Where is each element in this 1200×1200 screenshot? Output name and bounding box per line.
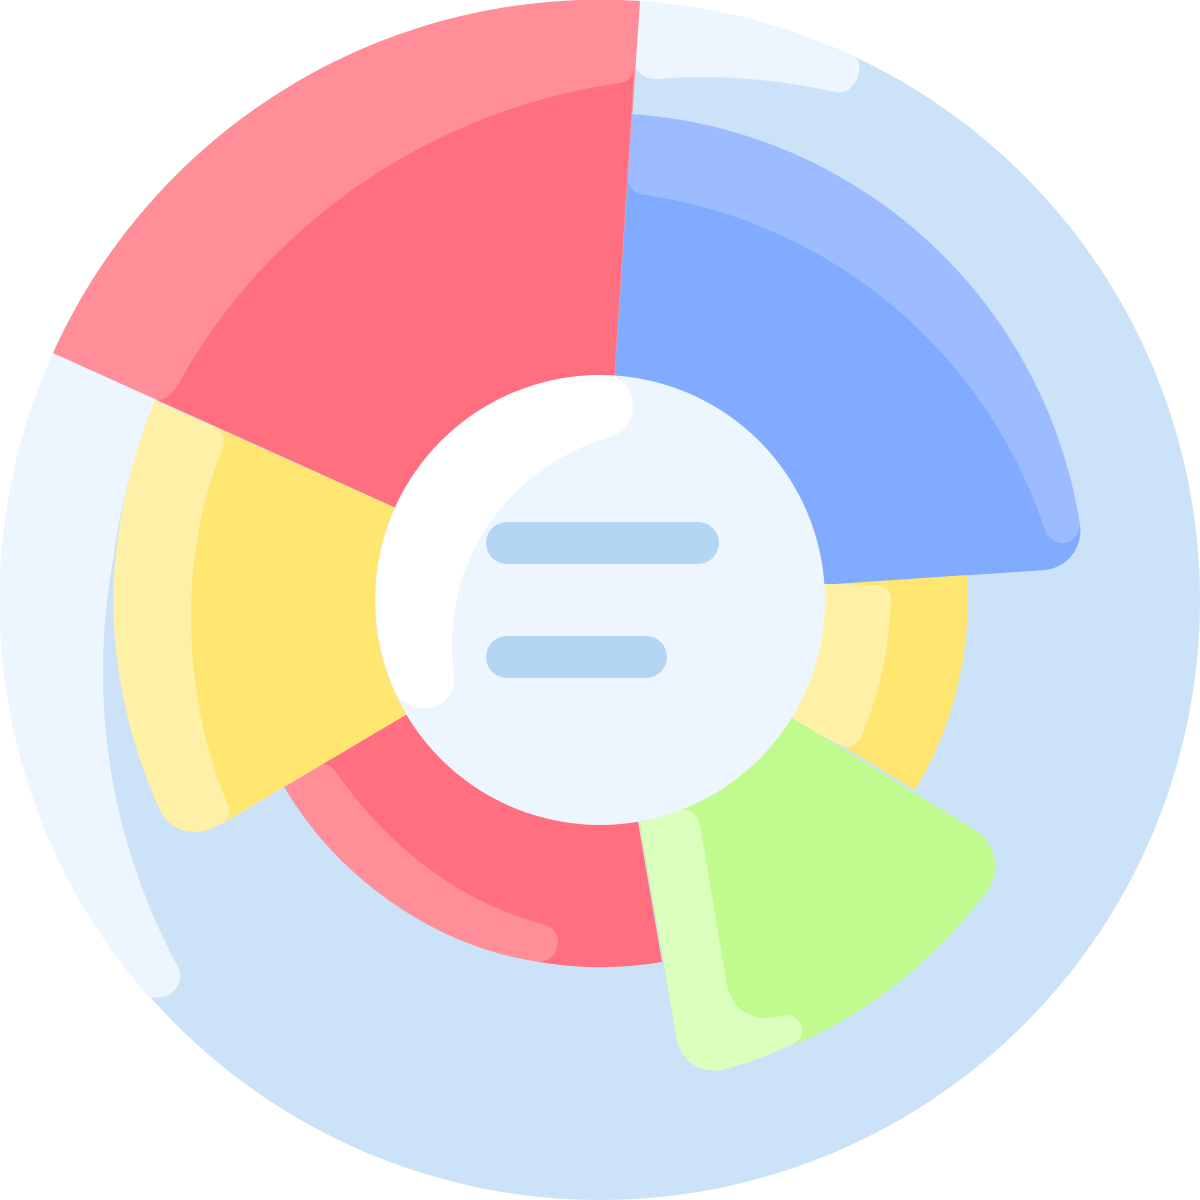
center bar: bottom — [486, 636, 667, 678]
top rim highlight — [634, 1, 860, 92]
red segment light edge — [53, 0, 640, 600]
center bar: top — [486, 522, 719, 564]
green body — [600, 600, 995, 1071]
center disc white highlight — [376, 375, 633, 708]
blue segment body — [600, 178, 1080, 600]
blue segment light edge — [600, 114, 1080, 600]
left yellow light edge — [113, 400, 600, 832]
segment: left yellow — [113, 400, 600, 832]
segment: green — [600, 600, 995, 1071]
right yellow light edge — [600, 584, 891, 747]
left yellow body — [191, 427, 600, 822]
red segment body — [157, 68, 634, 600]
center disc — [375, 375, 825, 825]
left rim highlight — [0, 353, 180, 998]
bottom red light edge — [283, 764, 558, 962]
segment: right yellow — [600, 575, 968, 790]
segment: large red — [53, 0, 640, 600]
segment: bottom red — [283, 600, 662, 967]
bottom red body — [283, 600, 662, 967]
right yellow body — [600, 575, 968, 790]
green light edge — [640, 810, 802, 1071]
segment: blue — [600, 114, 1080, 600]
